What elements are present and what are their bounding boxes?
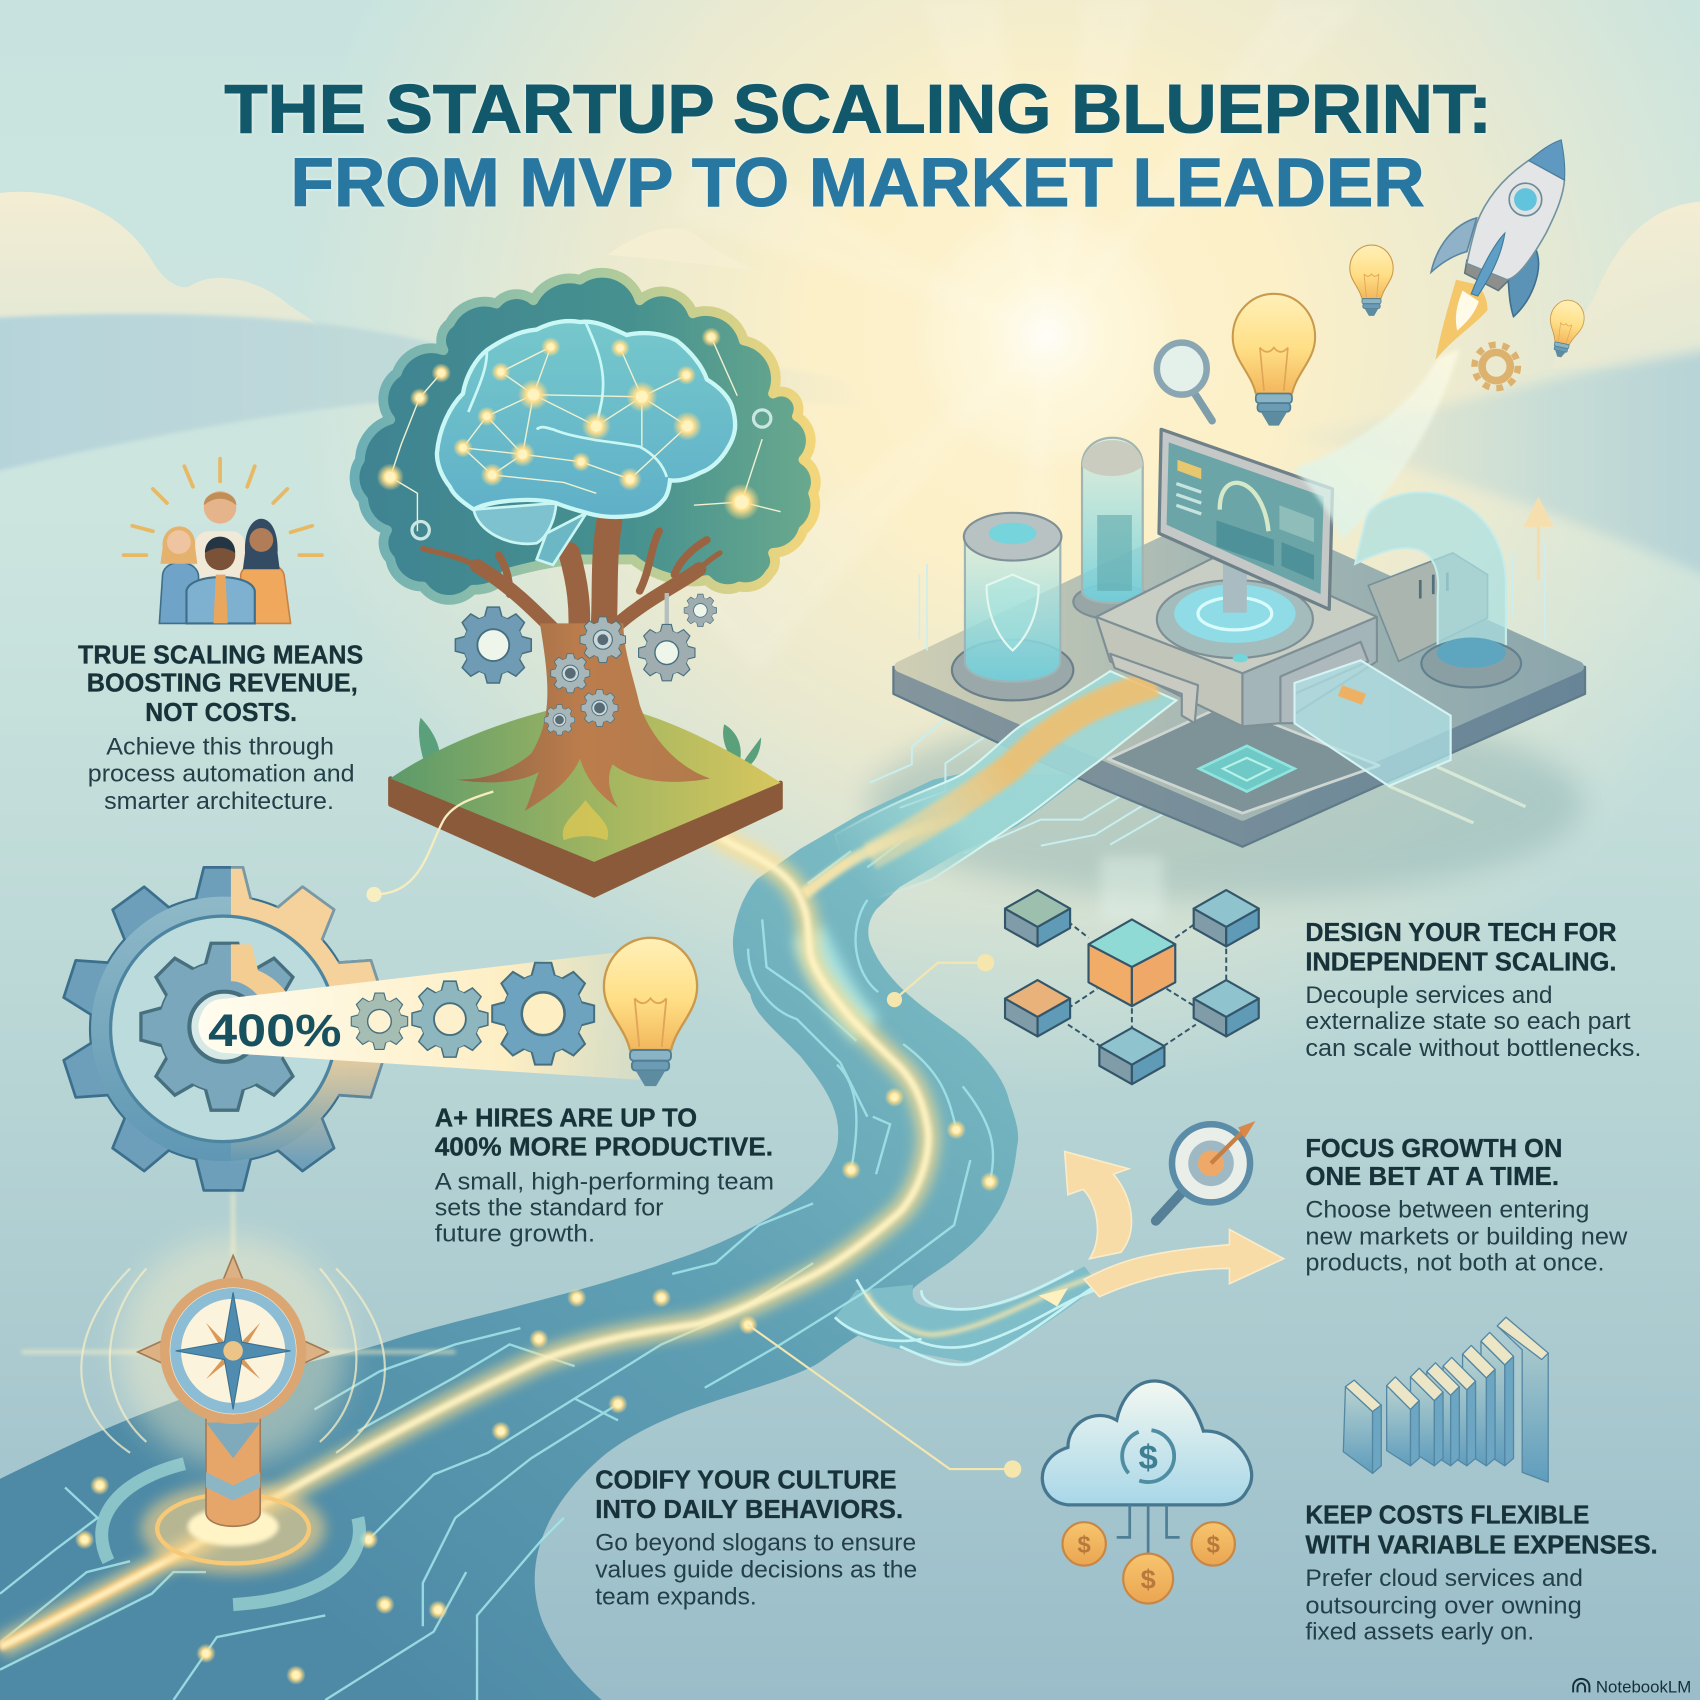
icon: target with magnifier (1156, 1121, 1255, 1221)
lower chip panel (1108, 705, 1379, 813)
vertical light lines (919, 542, 1545, 651)
text: keep costs (1305, 1501, 1658, 1645)
flow band into port (835, 671, 1176, 905)
pipes (1117, 1505, 1180, 1556)
cube left face (1096, 617, 1242, 726)
small gears row (351, 963, 594, 1065)
left port frame (1110, 654, 1198, 723)
platform: tech machine (835, 429, 1585, 905)
road branch (835, 1266, 1099, 1362)
back man (195, 491, 245, 596)
text: design tech (1305, 919, 1641, 1062)
text: keep costs: KEEP COSTS FLEXIBLE (1305, 1501, 1589, 1529)
connector: tree to gear (366, 791, 493, 902)
left woman (159, 526, 201, 623)
icon: small bulb left (1350, 245, 1393, 316)
cube disc (1157, 580, 1313, 658)
arrow to the right (1084, 1229, 1284, 1297)
brain stem (537, 513, 587, 565)
brain (377, 321, 781, 565)
text: codify culture (595, 1467, 917, 1611)
text: true scaling: process automation and (88, 761, 355, 788)
coin bottom: $ (1141, 1563, 1156, 1594)
title (224, 71, 1492, 221)
coin left (1062, 1522, 1106, 1566)
nose (1529, 140, 1565, 180)
arch tube (1355, 492, 1521, 687)
compass tips (138, 1255, 329, 1368)
dollar cycle: $ (1139, 1439, 1158, 1477)
central orange cube (1089, 919, 1175, 1006)
text: design tech: externalize state so each part (1305, 1008, 1631, 1035)
base band (1465, 260, 1509, 291)
left fin (1431, 218, 1477, 272)
text: design tech: DESIGN YOUR TECH FOR (1305, 919, 1617, 947)
body (1467, 160, 1564, 280)
compass pillar (22, 1193, 455, 1605)
circuit lines (0, 835, 993, 1700)
sun burst rays (124, 459, 322, 555)
text: design tech: can scale without bottlenecks. (1305, 1035, 1641, 1062)
island grass (390, 703, 781, 862)
central cube (1096, 550, 1377, 726)
cube top face (1096, 550, 1377, 673)
dashed links (1068, 922, 1226, 1046)
text: true scaling: BOOSTING REVENUE, (87, 670, 358, 698)
text: keep costs: WITH VARIABLE EXPENSES. (1305, 1532, 1658, 1560)
text: true scaling: Achieve this through (106, 734, 334, 761)
hanging string (665, 593, 669, 627)
title: FROM MVP TO MARKET LEADER (291, 145, 1425, 221)
inner gear (141, 943, 308, 1110)
coin left: $ (1078, 1532, 1091, 1559)
gear inner disc (111, 916, 336, 1142)
cyan glow (808, 932, 867, 1030)
icon: magnifier (1157, 343, 1212, 421)
hill left (0, 314, 867, 481)
text: a plus hires: sets the standard for (435, 1194, 664, 1221)
text: codify culture: INTO DAILY BEHAVIORS. (595, 1496, 903, 1524)
notebooklm watermark: NotebookLM (1596, 1677, 1691, 1696)
branch spark (1039, 1288, 1068, 1306)
rocket beam (1293, 349, 1459, 540)
cube right face (1242, 617, 1377, 726)
compass halo (119, 1237, 347, 1465)
accordion bars icon (1343, 1317, 1548, 1482)
icon: bulb (604, 938, 697, 1086)
base pad side (893, 667, 1585, 847)
text: true scaling: smarter architecture. (104, 788, 334, 815)
text: keep costs: outsourcing over owning (1305, 1592, 1582, 1619)
branches (423, 523, 720, 651)
text: focus growth (1305, 1135, 1628, 1277)
branch ribbon lines (835, 1271, 1106, 1365)
right back box (1368, 553, 1488, 661)
orange stream tail (0, 1551, 184, 1647)
text: design tech: INDEPENDENT SCALING. (1305, 948, 1617, 976)
cube disc glow (1174, 584, 1296, 643)
text: focus growth: new markets or building new (1305, 1224, 1628, 1251)
cube lower left (1005, 980, 1070, 1036)
up arrow (1523, 497, 1554, 580)
tree (355, 273, 816, 896)
glowing plant on soil (563, 800, 608, 840)
flare (22, 1193, 455, 1352)
cubes network (1005, 857, 1259, 1084)
cube disc ring (1198, 597, 1272, 630)
cube top left (1005, 890, 1070, 946)
beam (198, 950, 640, 1080)
winding circuit road (0, 773, 1117, 1700)
connector to cloud (748, 1325, 1021, 1478)
platform ground shadow (867, 705, 1583, 900)
text: keep costs: Prefer cloud services and (1305, 1565, 1583, 1592)
text: a plus hires: A+ HIRES ARE UP TO (435, 1104, 697, 1132)
signal arcs (81, 1268, 385, 1453)
sun glow (911, 201, 1182, 472)
front man (186, 537, 255, 623)
text: true scaling: TRUE SCALING MEANS (78, 642, 363, 670)
right port frame (1280, 642, 1368, 723)
orange stream (870, 683, 1156, 857)
circuit nodes (75, 1087, 1000, 1685)
coin right: $ (1207, 1532, 1220, 1559)
compass ring (165, 1283, 301, 1419)
tree gears (455, 594, 717, 735)
light trail (1389, 767, 1525, 823)
text: a plus hires (435, 1104, 774, 1247)
cube bottom (1099, 1028, 1164, 1084)
island soil (390, 778, 781, 896)
big gear chart (61, 867, 697, 1190)
cube lower right (1194, 980, 1259, 1036)
pad circuit lines (870, 710, 1174, 853)
cloud left (0, 192, 369, 390)
left cylinder (952, 513, 1073, 700)
text: codify culture: team expands. (595, 1584, 757, 1611)
flame (1435, 280, 1488, 360)
text: a plus hires: A small, high-performing team (435, 1168, 774, 1195)
monitor (1159, 429, 1332, 613)
dollar cycle (1122, 1430, 1174, 1482)
gold energy stream (0, 819, 928, 1647)
growth arrows (1039, 1151, 1284, 1306)
text: focus growth: Choose between entering (1305, 1197, 1589, 1224)
title: THE STARTUP SCALING BLUEPRINT: (224, 71, 1492, 147)
outer gear orange half (230, 866, 384, 1158)
right fin (1508, 250, 1538, 317)
gold stream to branch (866, 1271, 1117, 1335)
coin right (1192, 1522, 1235, 1566)
connector to cubes (887, 954, 994, 1007)
sun rays (672, 0, 1366, 759)
cloud right (1550, 202, 1700, 369)
brain nodes (377, 327, 760, 521)
icon: large light bulb (1233, 294, 1315, 426)
orange tag (1338, 685, 1366, 705)
center fin (1471, 233, 1505, 296)
hill right (1279, 342, 1700, 607)
cloud with coins icon (1042, 1381, 1252, 1604)
outer gear blue (61, 867, 386, 1190)
back cylinder (1073, 438, 1151, 619)
cube glow (1100, 857, 1163, 922)
canopy (355, 273, 816, 600)
cube top right (1194, 890, 1259, 946)
cerebellum (474, 503, 556, 544)
icon: small bulb right (1543, 297, 1588, 360)
icon: small gold gear (1474, 345, 1518, 388)
status light (1233, 654, 1248, 662)
text: keep costs: fixed assets early on. (1305, 1618, 1534, 1645)
chip (1199, 746, 1295, 791)
base glow (102, 1464, 359, 1605)
400 percent value: 400% (208, 1005, 342, 1056)
text: true scaling (78, 642, 363, 815)
text: a plus hires: 400% MORE PRODUCTIVE. (435, 1134, 773, 1162)
text: codify culture: values guide decisions as the (595, 1556, 917, 1583)
cloud body (1042, 1381, 1252, 1505)
small cloud (607, 228, 759, 271)
road band (0, 773, 1084, 1700)
coin bottom (1123, 1554, 1173, 1604)
gold stream to platform (803, 814, 966, 894)
team people icon (124, 459, 322, 623)
text: true scaling: NOT COSTS. (145, 699, 297, 727)
ring ornaments (412, 410, 771, 539)
right woman (241, 519, 291, 623)
text: codify culture: Go beyond slogans to ensure (595, 1529, 916, 1556)
compass blue ring (176, 1293, 291, 1408)
window (1509, 183, 1542, 216)
compass star (176, 1292, 291, 1409)
arrow up (1065, 1151, 1131, 1259)
gold energy stream glow (0, 819, 928, 1647)
text: focus growth: FOCUS GROWTH ON (1305, 1135, 1562, 1163)
network lines (390, 337, 781, 531)
brain folds (468, 322, 667, 477)
translucent conveyor (1295, 660, 1451, 786)
plants (410, 718, 761, 791)
trunk body and roots (455, 623, 710, 811)
text: a plus hires: future growth. (435, 1220, 595, 1247)
text: codify culture: CODIFY YOUR CULTURE (595, 1467, 897, 1495)
pole (206, 1415, 260, 1526)
brain outline (437, 321, 735, 517)
rocket (1431, 140, 1565, 360)
text: focus growth: ONE BET AT A TIME. (1305, 1163, 1559, 1191)
text: design tech: Decouple services and (1305, 982, 1553, 1009)
text: focus growth: products, not both at once. (1305, 1250, 1605, 1277)
base pad top (900, 510, 1579, 815)
